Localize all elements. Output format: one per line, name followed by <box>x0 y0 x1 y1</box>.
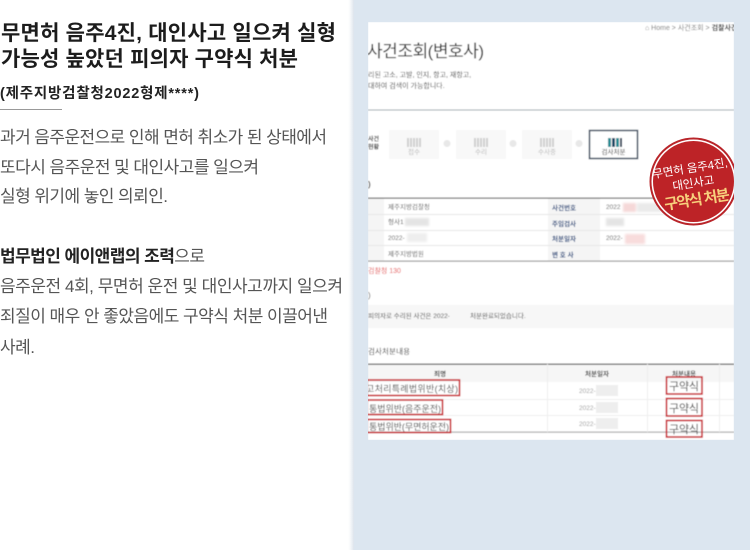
progress steps: 수리 <box>475 147 487 156</box>
progress steps: 사건 <box>368 135 380 143</box>
red highlight boxes <box>367 377 702 437</box>
page heading: 사건조회(변호사) <box>367 42 484 61</box>
section marker: ) <box>368 291 371 300</box>
disposition table: 구약식 <box>669 401 699 415</box>
case number subtitle: (제주지방검찰청2022형제****) <box>0 85 199 102</box>
page description <box>368 70 471 90</box>
notice strip: 피의자로 수리된 사건은 2022- <box>368 311 450 320</box>
case info table <box>368 198 734 262</box>
current step: prosecution disposition: 검사처분 <box>602 147 625 156</box>
progress steps: 접수 <box>408 148 420 156</box>
paragraph: outcome <box>0 247 343 357</box>
disposition table: 2022- <box>579 388 596 395</box>
court note: 검찰청 130 <box>368 266 401 275</box>
progress steps: 현황 <box>368 143 380 151</box>
case info table: 제주지방검찰청 <box>388 202 430 211</box>
case info table: 주임검사 <box>552 219 576 228</box>
case info table: 제주지방법원 <box>388 249 424 258</box>
disposition table: 2022- <box>579 421 596 428</box>
case info table: 처분일자 <box>552 234 576 243</box>
section marker: ) <box>368 180 371 189</box>
current step: prosecution disposition <box>590 130 638 158</box>
disposition table: 2022- <box>579 405 596 412</box>
stamp: red circular badge: 무면허 음주4진, <box>652 156 729 181</box>
progress steps: 수사중 <box>538 147 556 156</box>
disposition table: 죄명 <box>434 369 446 378</box>
case lookup screenshot <box>366 22 750 440</box>
notice strip: 처분완료되었습니다. <box>470 311 526 320</box>
case info table: 사건번호 <box>552 203 576 212</box>
disposition table: 구약식 <box>669 379 699 393</box>
disposition table: 통법위반(무면허운전) <box>369 422 449 432</box>
disposition table: 구약식 <box>669 422 699 436</box>
right panel background <box>348 0 750 550</box>
title <box>1 22 336 71</box>
paragraph: background: 또다시 음주운전 및 대인사고를 일으켜 <box>0 158 259 177</box>
paragraph: background: 과거 음주운전으로 인해 면허 취소가 된 상태에서 <box>0 128 327 147</box>
stamp: red circular badge <box>650 138 736 224</box>
disposition table: 처분내용 <box>672 369 696 378</box>
disposition table: 고처리특례법위반(치상) <box>366 383 458 394</box>
progress steps <box>368 130 638 159</box>
stamp: red circular badge: 구약식 처분 <box>663 187 731 214</box>
page description: 대하여 검색이 가능합니다. <box>368 81 445 90</box>
page description: 리된 고소, 고발, 인지, 항고, 재항고, <box>368 70 471 79</box>
paragraph: outcome: 음주운전 4회, 무면허 운전 및 대인사고까지 일으켜 <box>0 277 343 296</box>
notice strip <box>368 312 526 320</box>
section heading: disposition detail: 검사처분내용 <box>368 346 410 356</box>
title: 가능성 높았던 피의자 구약식 처분 <box>1 48 298 71</box>
breadcrumb: ⌂ Home > 사건조회 > 검찰사건조회 <box>645 23 750 32</box>
disposition table: 통법위반(음주운전) <box>369 404 441 414</box>
case info table: 형사1 <box>388 217 404 226</box>
paragraph: background: 실형 위기에 놓인 의뢰인. <box>0 187 168 206</box>
case info table: 2022 <box>606 204 621 211</box>
case info table: 변 호 사 <box>552 250 574 259</box>
stamp: red circular badge: 대인사고 <box>672 174 715 193</box>
disposition table <box>366 364 734 437</box>
left text panel <box>0 0 354 550</box>
short divider <box>0 109 62 110</box>
title: 무면허 음주4진, 대인사고 일으켜 실형 <box>1 22 336 45</box>
paragraph: background <box>0 128 327 206</box>
paragraph: outcome: 죄질이 매우 안 좋았음에도 구약식 처분 이끌어낸 <box>0 307 328 326</box>
case info table: 2022- <box>388 235 405 242</box>
paragraph: outcome: 사례. <box>0 338 35 357</box>
paragraph: outcome: 법무법인 에이앤랩의 조력으로 <box>0 247 205 266</box>
disposition table: 처분일자 <box>585 369 609 378</box>
case info table: 2022- <box>606 235 623 242</box>
